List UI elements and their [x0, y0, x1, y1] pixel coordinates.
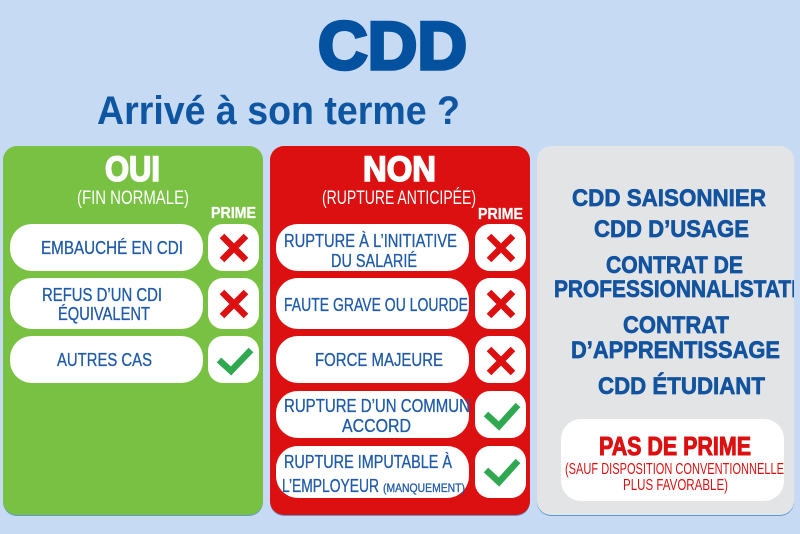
row: rupture d'un commun accord: RUPTURE D’UN COMMUN	[284, 395, 470, 416]
row: faute grave ou lourde: FAUTE GRAVE OU LOURDE	[284, 294, 468, 315]
item: CDD saisonnier: CDD SAISONNIER	[572, 185, 766, 212]
item: contrat d'apprentissage	[571, 312, 780, 364]
item: contrat de professionnalisation	[555, 256, 794, 298]
row: rupture d'un commun accord: ACCORD	[342, 415, 411, 436]
heading: OUI: OUI	[105, 150, 160, 189]
row: embauché en CDI: EMBAUCHÉ EN CDI	[41, 237, 183, 258]
item: CDD d'usage: CDD D’USAGE	[594, 216, 749, 243]
callout: pas de prime: PAS DE PRIME	[599, 431, 751, 461]
icon: check	[208, 336, 259, 383]
icon: cross	[208, 224, 259, 271]
column label: prime: PRIME	[211, 205, 256, 222]
callout: pas de prime	[561, 419, 784, 501]
callout: pas de prime: PLUS FAVORABLE)	[623, 477, 728, 494]
row: refus d'un CDI: REFUS D’UN CDI	[42, 284, 162, 305]
item: contrat d'apprentissage: D’APPRENTISSAGE	[571, 337, 780, 364]
row: refus d'un CDI	[10, 278, 203, 329]
icon: check	[475, 446, 526, 498]
row: force majeure: FORCE MAJEURE	[315, 349, 443, 370]
row: rupture à l'initiative du salarié	[276, 224, 469, 271]
panel: OUI	[3, 146, 263, 516]
panel: other contracts	[537, 146, 797, 516]
icon: check	[475, 391, 526, 438]
icon: cross	[208, 278, 259, 329]
row: force majeure	[276, 336, 469, 383]
title: CDD	[318, 8, 467, 84]
row: rupture imputable à l'employeur: (MANQUEMENT)	[383, 481, 465, 495]
row: autres cas	[10, 336, 203, 383]
subtitle: Arrivé à son terme ?	[97, 89, 460, 133]
item: contrat de professionnalisation: CONTRAT DE	[606, 252, 743, 279]
row: autres cas: AUTRES CAS	[57, 349, 152, 370]
heading: NON: NON	[363, 150, 436, 189]
column label: prime: PRIME	[478, 206, 523, 223]
row: faute grave ou lourde	[276, 278, 469, 329]
row: rupture imputable à l'employeur	[276, 446, 469, 498]
icon: cross	[475, 278, 526, 329]
subheading: rupture anticipée: (RUPTURE ANTICIPÉE)	[322, 188, 476, 209]
icon: cross	[475, 224, 526, 271]
row: rupture imputable à l'employeur: RUPTURE IMPUTABLE À	[284, 451, 453, 472]
item: CDD étudiant: CDD ÉTUDIANT	[598, 372, 765, 400]
row: rupture à l'initiative du salarié: RUPTURE À L’INITIATIVE	[284, 230, 457, 251]
row: refus d'un CDI: ÉQUIVALENT	[58, 303, 150, 324]
item: contrat d'apprentissage: CONTRAT	[623, 312, 729, 339]
row: rupture à l'initiative du salarié: DU SALARIÉ	[331, 250, 417, 271]
panel: NON	[270, 146, 530, 516]
icon: cross	[475, 336, 526, 383]
row: rupture d'un commun accord	[276, 391, 470, 438]
row: rupture imputable à l'employeur: L’EMPLOYEUR	[282, 475, 379, 496]
subheading: fin normale: (FIN NORMALE)	[77, 188, 189, 209]
row: embauché en CDI	[10, 224, 203, 271]
